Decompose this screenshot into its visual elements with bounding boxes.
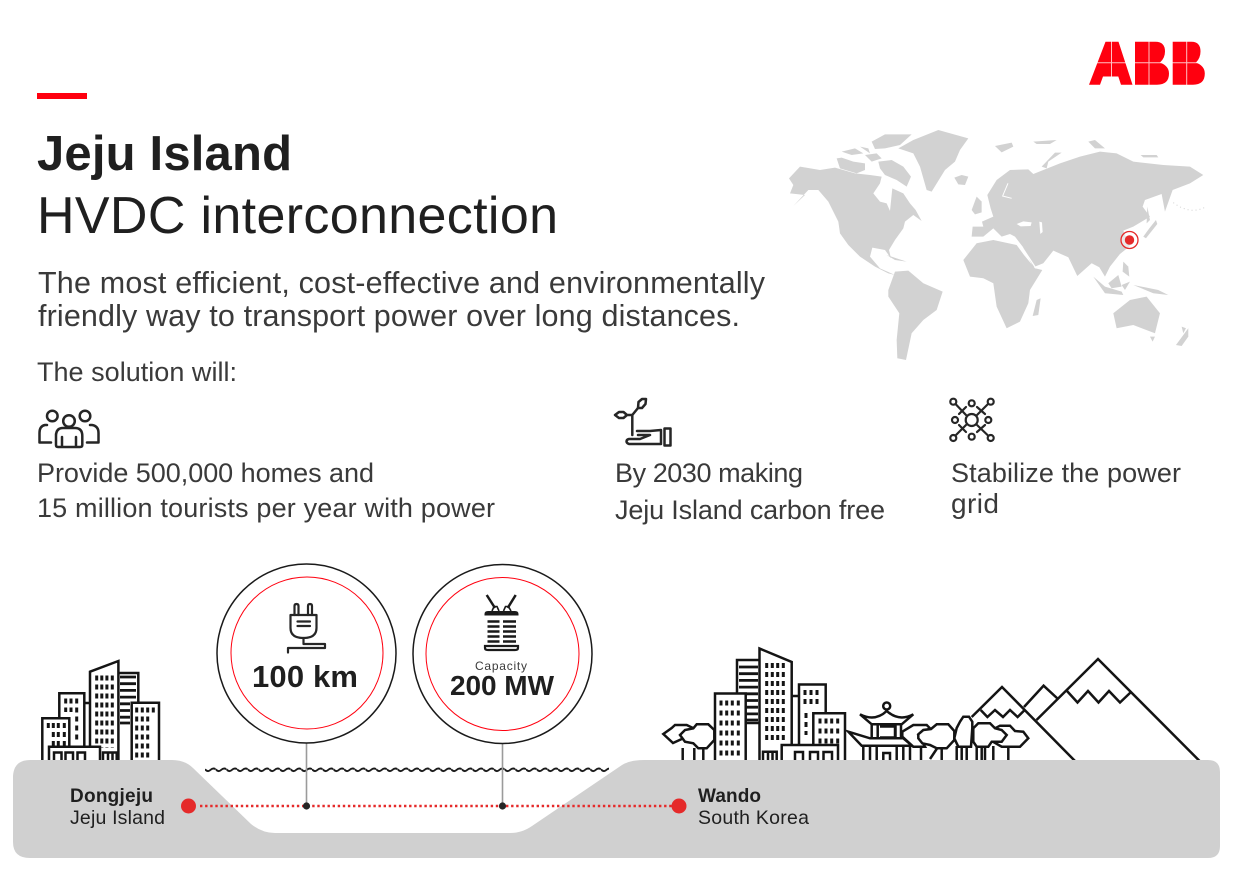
city skyline: Dongjeju [42, 661, 159, 764]
rest of the world [888, 140, 1205, 360]
label: Wando: South Korea [698, 807, 809, 829]
label: Dongjeju: Dongjeju [70, 786, 153, 807]
callout: cable length: 100 km [252, 659, 358, 694]
ABB logo [1089, 41, 1206, 85]
trees behind pagoda and left group [663, 724, 1008, 762]
trees right group [902, 717, 1028, 748]
cable connector stems [306, 743, 502, 806]
label: Dongjeju: Jeju Island [70, 807, 165, 829]
text: stabilize grid: grid [951, 488, 999, 519]
title [37, 127, 558, 245]
label: Wando [698, 786, 809, 829]
subtitle [38, 266, 766, 333]
text: stabilize grid [951, 458, 1181, 519]
title: HVDC interconnection [37, 187, 558, 245]
callout: capacity [413, 564, 592, 744]
North America and Arctic islands [789, 130, 968, 275]
ground cross-section [13, 760, 1220, 858]
lead-in text: The solution will: [37, 357, 237, 387]
text: homes and tourists: 15 million tourists per year with power [37, 493, 495, 523]
text: homes and tourists: Provide 500,000 homes and [37, 458, 374, 488]
text: carbon free: By 2030 making [615, 458, 803, 488]
title: Jeju Island [37, 127, 292, 181]
HVDC cable route [181, 798, 686, 814]
map marker: Jeju [1121, 232, 1138, 248]
world map [789, 130, 1205, 360]
callout: cable length [217, 564, 396, 743]
text: carbon free: Jeju Island carbon free [615, 495, 885, 525]
icon: plug [288, 604, 325, 652]
icon: plant in hand [615, 399, 670, 446]
text: carbon free [615, 458, 885, 525]
callout: capacity: Capacity [475, 659, 527, 673]
buildings [715, 648, 845, 764]
red accent rule [37, 93, 87, 99]
subtitle: friendly way to transport power over long distances. [38, 299, 740, 333]
icon: transformer [484, 595, 518, 650]
icon: grid network [950, 399, 994, 441]
text: homes and tourists [37, 458, 495, 523]
icon: people [40, 411, 98, 447]
mountains [972, 659, 1200, 761]
callout: capacity: 200 MW [450, 670, 555, 701]
label: Wando: Wando [698, 786, 761, 807]
sea surface waves [205, 766, 609, 774]
text: stabilize grid: Stabilize the power [951, 458, 1181, 488]
subtitle: The most efficient, cost-effective and environmentally [38, 266, 766, 300]
pagoda [848, 702, 913, 762]
label: Dongjeju [70, 786, 165, 829]
city skyline, pagoda, trees and mountains: Wando [663, 648, 1200, 764]
